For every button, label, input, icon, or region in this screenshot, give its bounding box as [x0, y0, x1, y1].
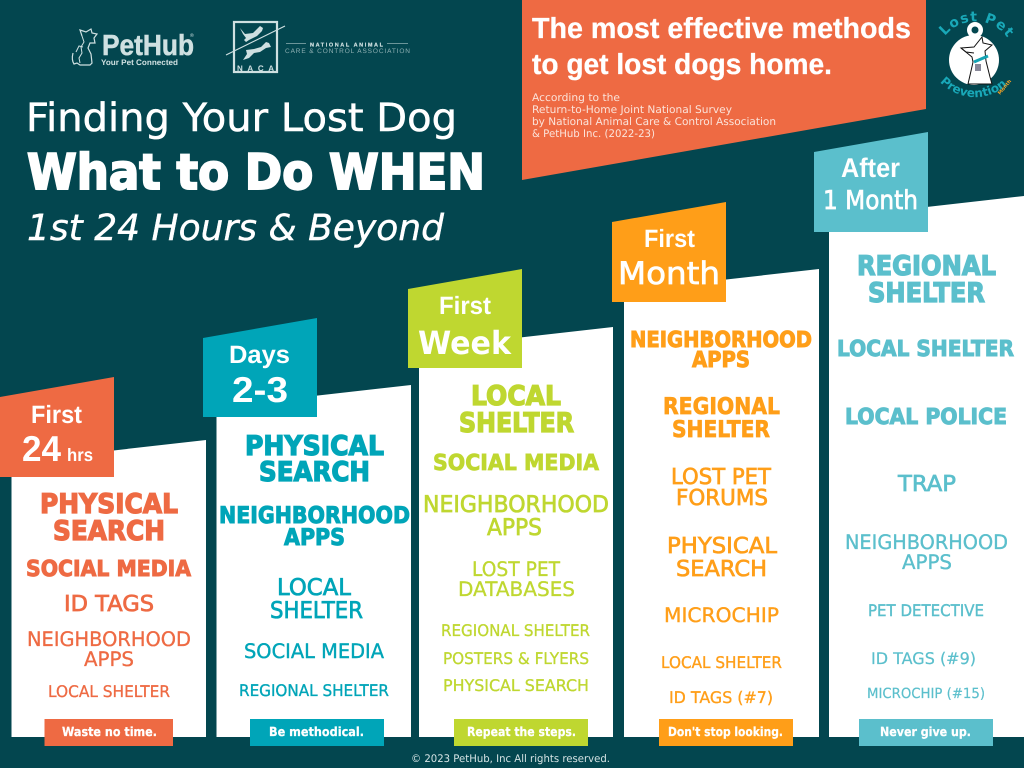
methods list: first week: REGIONAL SHELTER	[441, 621, 590, 640]
tag: Days 2-3: 2-3	[232, 369, 288, 410]
title	[26, 96, 485, 249]
panel: first week	[408, 269, 613, 746]
methods list: first 24 hours	[26, 489, 191, 701]
methods list: first 24 hours: SEARCH	[53, 516, 165, 547]
methods list: first week: NEIGHBORHOOD	[423, 492, 609, 518]
methods list: after 1 month: NEIGHBORHOOD	[845, 530, 1008, 554]
footer label: Repeat the steps.	[454, 719, 588, 746]
tag: First 24 hrs	[0, 377, 114, 477]
footer label: Never give up.	[859, 719, 993, 746]
footer label: Don't stop looking.	[659, 719, 793, 746]
methods list: days 2-3: SEARCH	[259, 457, 370, 488]
title: Finding Your Lost Dog	[26, 96, 457, 141]
methods list: after 1 month: PET DETECTIVE	[868, 601, 984, 620]
methods list: first month: LOCAL SHELTER	[661, 653, 782, 672]
logo: PetHub: ®	[190, 33, 194, 39]
methods list: after 1 month: MICROCHIP (#15)	[867, 686, 985, 702]
methods list: first month: MICROCHIP	[664, 603, 779, 627]
methods list: first week: POSTERS & FLYERS	[443, 649, 589, 668]
footer label: Be methodical.	[250, 719, 384, 746]
panel: days 2-3	[203, 318, 411, 746]
methods list: first month: NEIGHBORHOOD	[630, 328, 812, 353]
methods list: first week: APPS	[487, 515, 542, 541]
footer label: Don't stop looking.: Don't stop looking.	[668, 724, 783, 739]
methods list: days 2-3	[219, 431, 410, 700]
tag: First Month	[612, 202, 726, 302]
panel: after 1 month	[814, 132, 1024, 746]
methods list: days 2-3: SOCIAL MEDIA	[244, 639, 384, 663]
logo: PetHub: PetHub	[102, 30, 194, 62]
logo: NACA: NATIONAL ANIMAL	[310, 42, 384, 48]
copyright: © 2023 PetHub, Inc All rights reserved.	[411, 753, 610, 765]
methods list: days 2-3: SHELTER	[270, 598, 363, 624]
methods list: after 1 month: REGIONAL	[857, 251, 996, 282]
tag: After 1 Month: After	[841, 153, 900, 183]
methods list: days 2-3: PHYSICAL	[245, 431, 384, 462]
methods list: after 1 month: LOCAL POLICE	[845, 405, 1007, 430]
methods list: first week: DATABASES	[458, 577, 575, 601]
methods list: days 2-3: REGIONAL SHELTER	[239, 681, 389, 700]
methods list: first month: FORUMS	[676, 486, 768, 511]
methods list: first week: PHYSICAL SEARCH	[443, 676, 589, 695]
methods list: after 1 month	[837, 251, 1014, 702]
tag: First Month: First	[644, 225, 696, 253]
methods list: first month: LOST PET	[671, 465, 772, 490]
methods list: days 2-3: APPS	[284, 525, 345, 551]
footer label: Be methodical.: Be methodical.	[269, 724, 364, 739]
tag: Days 2-3	[203, 318, 317, 417]
tag: First 24 hrs: hrs	[67, 445, 93, 465]
methods list: after 1 month: ID TAGS (#9)	[871, 649, 976, 668]
panel: survey callout: to get lost dogs home.	[532, 49, 832, 81]
methods list: days 2-3: LOCAL	[277, 575, 351, 601]
methods list: first month: REGIONAL	[663, 394, 780, 420]
tag: First Week: First	[439, 292, 492, 320]
panel: survey callout: The most effective methods	[532, 13, 911, 45]
panel: survey callout: Return-to-Home Joint National Survey	[532, 104, 732, 116]
badge: Lost Pet Prevention Month: Lost Pet	[938, 12, 1013, 38]
methods list: first 24 hours: NEIGHBORHOOD	[27, 627, 191, 651]
badge: Lost Pet Prevention Month	[938, 12, 1013, 98]
panel: survey callout: & PetHub Inc. (2022-23)	[532, 128, 655, 140]
tag: First Week: Week	[418, 324, 512, 362]
badge: Lost Pet Prevention Month: Prevention	[940, 76, 1006, 98]
methods list: first week: SOCIAL MEDIA	[433, 451, 599, 476]
methods list: after 1 month: SHELTER	[868, 278, 985, 309]
methods list: first 24 hours: LOCAL SHELTER	[48, 682, 170, 701]
footer label: Waste no time.: Waste no time.	[62, 724, 157, 739]
methods list: first 24 hours: SOCIAL MEDIA	[26, 557, 191, 582]
methods list: first month: SEARCH	[676, 557, 767, 582]
panel: first 24 hours	[0, 377, 206, 746]
methods list: first 24 hours: PHYSICAL	[40, 489, 178, 520]
methods list: first month	[630, 328, 812, 707]
footer label: Repeat the steps.: Repeat the steps.	[467, 724, 576, 739]
logo: NACA: NACA	[237, 64, 274, 73]
logo: PetHub: Your Pet Connected	[101, 58, 178, 67]
logo: PetHub	[72, 29, 194, 67]
tag: First Week	[408, 269, 522, 368]
footer label: Waste no time.	[44, 719, 173, 746]
methods list: first 24 hours: APPS	[84, 647, 134, 671]
logo: NACA	[226, 22, 410, 73]
title: What to Do WHEN	[27, 144, 485, 201]
panel: survey callout: by National Animal Care & Control Association	[532, 116, 776, 128]
panel: survey callout	[522, 0, 926, 180]
panel: first month	[612, 202, 819, 746]
methods list: days 2-3: NEIGHBORHOOD	[219, 503, 410, 529]
tag: First Month: Month	[618, 256, 720, 292]
methods list: first week: LOST PET	[472, 557, 561, 581]
methods list: after 1 month: APPS	[902, 550, 952, 574]
badge: Lost Pet Prevention Month: Month	[997, 78, 1013, 96]
methods list: after 1 month: TRAP	[897, 472, 956, 497]
methods list: first week: LOCAL	[471, 381, 561, 412]
tag: After 1 Month: 1 Month	[823, 186, 918, 216]
title: 1st 24 Hours & Beyond	[27, 208, 445, 249]
methods list: first month: PHYSICAL	[667, 534, 778, 559]
footer label: Never give up.: Never give up.	[880, 724, 971, 739]
logo: NACA: CARE & CONTROL ASSOCIATION	[285, 48, 410, 55]
methods list: first month: ID TAGS (#7)	[669, 688, 773, 707]
panel: survey callout: According to the	[532, 92, 620, 104]
tag: First 24 hrs: 24	[22, 428, 61, 469]
tag: Days 2-3: Days	[229, 341, 290, 369]
methods list: first week: SHELTER	[459, 408, 574, 439]
methods list: first 24 hours: ID TAGS	[64, 592, 154, 617]
tag: After 1 Month	[814, 132, 928, 232]
methods list: first week	[423, 381, 609, 695]
methods list: first month: SHELTER	[672, 417, 770, 443]
tag: First 24 hrs: First	[31, 401, 83, 429]
methods list: first month: APPS	[692, 348, 750, 373]
